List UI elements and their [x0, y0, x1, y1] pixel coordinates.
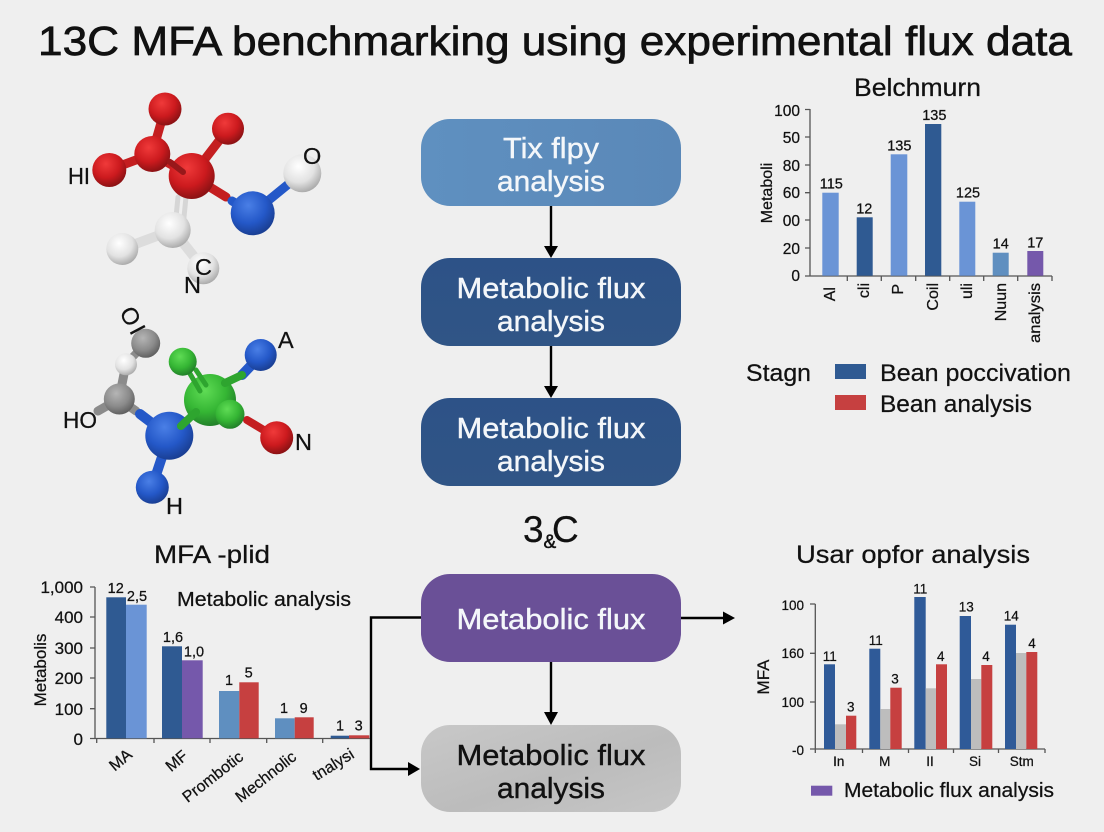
y axis label: Metaboli — [759, 163, 776, 223]
bar chart: Usar opfor analysis — [754, 541, 1054, 802]
y axis tick labels: 200 — [55, 669, 83, 688]
category labels: Al — [822, 287, 839, 301]
y axis tick labels: 100 — [774, 103, 800, 120]
category labels: M — [879, 754, 890, 769]
chart title: MFA -plid: MFA -plid — [154, 541, 270, 569]
bar value labels: 115 — [820, 176, 843, 192]
category labels: Nuun — [993, 283, 1010, 321]
bar value labels: 13 — [959, 600, 974, 615]
bar value labels — [108, 581, 363, 735]
category labels: II — [926, 754, 934, 769]
molecule: red, blue and white atoms: O — [303, 143, 321, 169]
bar value labels: 9 — [300, 701, 308, 717]
category labels: MF — [163, 747, 192, 775]
category labels: Prombotic — [180, 749, 247, 806]
arrow: purple box to right chart — [681, 612, 735, 624]
bar value labels: 3 — [891, 672, 899, 687]
bar value labels: 3 — [355, 719, 363, 735]
arrow: second to third box — [544, 346, 558, 398]
molecule: red, blue and white atoms: N — [184, 272, 201, 298]
bar chart: MFA -plid — [31, 541, 370, 806]
bar value labels: 11 — [823, 649, 837, 664]
category labels: Mechnolic — [233, 749, 300, 806]
molecule: green, blue, grey and red atoms — [63, 302, 312, 519]
y axis tick labels: 160 — [781, 646, 804, 661]
category labels: Coil — [925, 283, 942, 311]
y axis tick labels: 400 — [55, 608, 83, 627]
bar value labels: 12 — [856, 201, 872, 217]
flow box: Metabolic flux analysis grey: analysis — [497, 773, 605, 805]
chart title: Usar opfor analysis: Usar opfor analysis — [796, 541, 1030, 569]
label: 3&C: C — [552, 509, 579, 550]
category labels: cli — [856, 283, 873, 298]
bar value labels — [820, 108, 1043, 253]
axes and ticks — [805, 109, 1052, 281]
arrow: purple box down to grey box — [544, 662, 558, 725]
bar value labels: 5 — [245, 666, 253, 682]
molecule: red, blue and white atoms — [68, 92, 321, 298]
bars — [824, 597, 1037, 749]
y axis tick labels: 50 — [783, 130, 800, 147]
bars — [822, 124, 1043, 276]
flow box: Metabolic flux analysis grey — [421, 725, 681, 812]
flow box: Metabolic flux analysis 1: analysis — [497, 306, 605, 338]
y axis tick labels: 0 — [74, 730, 83, 749]
axes and ticks — [90, 587, 370, 743]
chart annotation: Metabolic analysis — [177, 589, 351, 611]
bar value labels: 3 — [847, 700, 854, 715]
flow box: Tix flpy analysis: analysis — [497, 166, 605, 198]
y axis tick labels — [40, 578, 83, 749]
y axis tick labels: 00 — [783, 213, 800, 230]
molecule: green, blue, grey and red atoms: HO — [63, 407, 97, 433]
bar value labels: 1,6 — [163, 630, 183, 646]
y axis tick labels: 300 — [55, 639, 83, 658]
y axis tick labels: 20 — [783, 241, 800, 258]
legend: Stagn: Bean poccivation — [880, 360, 1071, 387]
y axis tick labels: 100 — [55, 700, 83, 719]
category labels: tnalysi — [310, 746, 357, 784]
y axis tick labels: 100 — [781, 598, 804, 613]
arrow: elbow from purple box to grey box — [371, 618, 421, 776]
molecule: red, blue and white atoms: C — [195, 254, 212, 280]
bar value labels: 4 — [937, 649, 945, 664]
chart title: Belchmurn: Belchmurn — [854, 74, 981, 102]
y axis tick labels — [774, 103, 800, 285]
y axis label: Metabolis — [31, 634, 50, 706]
y axis tick labels: -0 — [792, 743, 804, 758]
flow box: Metabolic flux analysis 2: Metabolic flux — [456, 413, 646, 445]
category labels: In — [833, 754, 844, 769]
molecule: green, blue, grey and red atoms: N — [295, 429, 312, 455]
bars — [106, 597, 369, 738]
title: 13C MFA benchmarking using experimental flux data — [38, 18, 1072, 64]
category labels — [833, 754, 1034, 769]
bar chart: Belchmurn — [759, 74, 1052, 343]
y axis tick labels: 100 — [781, 695, 804, 710]
category labels: MA — [106, 746, 136, 775]
bar value labels: 17 — [1027, 235, 1043, 251]
molecule: red, blue and white atoms: HI — [68, 163, 90, 189]
category labels: analysis — [1027, 283, 1044, 343]
axes and ticks — [810, 604, 1045, 753]
bar value labels: 4 — [1028, 636, 1036, 651]
flow box: Metabolic flux analysis 1: Metabolic flux — [456, 273, 646, 305]
flow box: Metabolic flux analysis grey: Metabolic flux — [456, 740, 646, 772]
bar value labels: 135 — [922, 108, 946, 124]
flow box: Tix flpy analysis: Tix flpy — [503, 133, 600, 165]
arrow: first to second box — [544, 206, 558, 258]
bar value labels: 4 — [982, 649, 990, 664]
flow box: Metabolic flux purple — [421, 574, 681, 662]
category labels: P — [890, 284, 907, 295]
bar value labels: 12 — [108, 581, 124, 597]
legend: Stagn: Bean analysis — [880, 391, 1032, 418]
molecule: green, blue, grey and red atoms: H — [166, 493, 183, 519]
bar value labels: 125 — [956, 185, 980, 201]
legend: Stagn — [746, 360, 1071, 418]
y axis tick labels: 80 — [783, 158, 800, 175]
bar value labels: 11 — [913, 581, 927, 596]
category labels — [822, 283, 1044, 343]
y axis tick labels: 1,000 — [40, 578, 83, 597]
y axis tick labels — [781, 598, 804, 758]
category labels: Stm — [1010, 754, 1034, 769]
bar value labels: 2,5 — [127, 589, 147, 605]
y axis tick labels: 60 — [783, 185, 800, 202]
bar value labels — [823, 581, 1036, 715]
flow box: Metabolic flux analysis 1 — [421, 258, 681, 346]
bar value labels: 135 — [887, 139, 911, 155]
legend: Metabolic flux analysis: Metabolic flux analysis — [844, 780, 1054, 802]
label: 3&C — [523, 509, 579, 553]
bar value labels: 1 — [336, 719, 344, 735]
flow box: Metabolic flux analysis 2: analysis — [497, 446, 605, 478]
flow box: Metabolic flux analysis 2 — [421, 398, 681, 486]
bar value labels: 11 — [869, 633, 883, 648]
bar value labels: 1 — [280, 701, 288, 717]
bar value labels: 1,0 — [184, 645, 204, 661]
label: 3&C: & — [544, 532, 556, 553]
bar value labels: 1 — [225, 673, 233, 689]
category labels: Si — [969, 754, 981, 769]
bar value labels: 14 — [1004, 609, 1019, 624]
molecule: green, blue, grey and red atoms: A — [278, 327, 294, 353]
legend: Stagn: Stagn — [746, 360, 811, 387]
flow box: Metabolic flux purple: Metabolic flux — [456, 604, 646, 636]
label: 3&C: 3 — [523, 509, 544, 550]
bar value labels: 14 — [993, 237, 1009, 253]
category labels: uli — [959, 283, 976, 299]
y axis tick labels: 0 — [791, 268, 800, 285]
y axis label: MFA — [754, 659, 773, 694]
flow box: Tix flpy analysis — [421, 119, 681, 206]
category labels — [106, 746, 357, 806]
molecule: green, blue, grey and red atoms: OI — [115, 302, 152, 342]
